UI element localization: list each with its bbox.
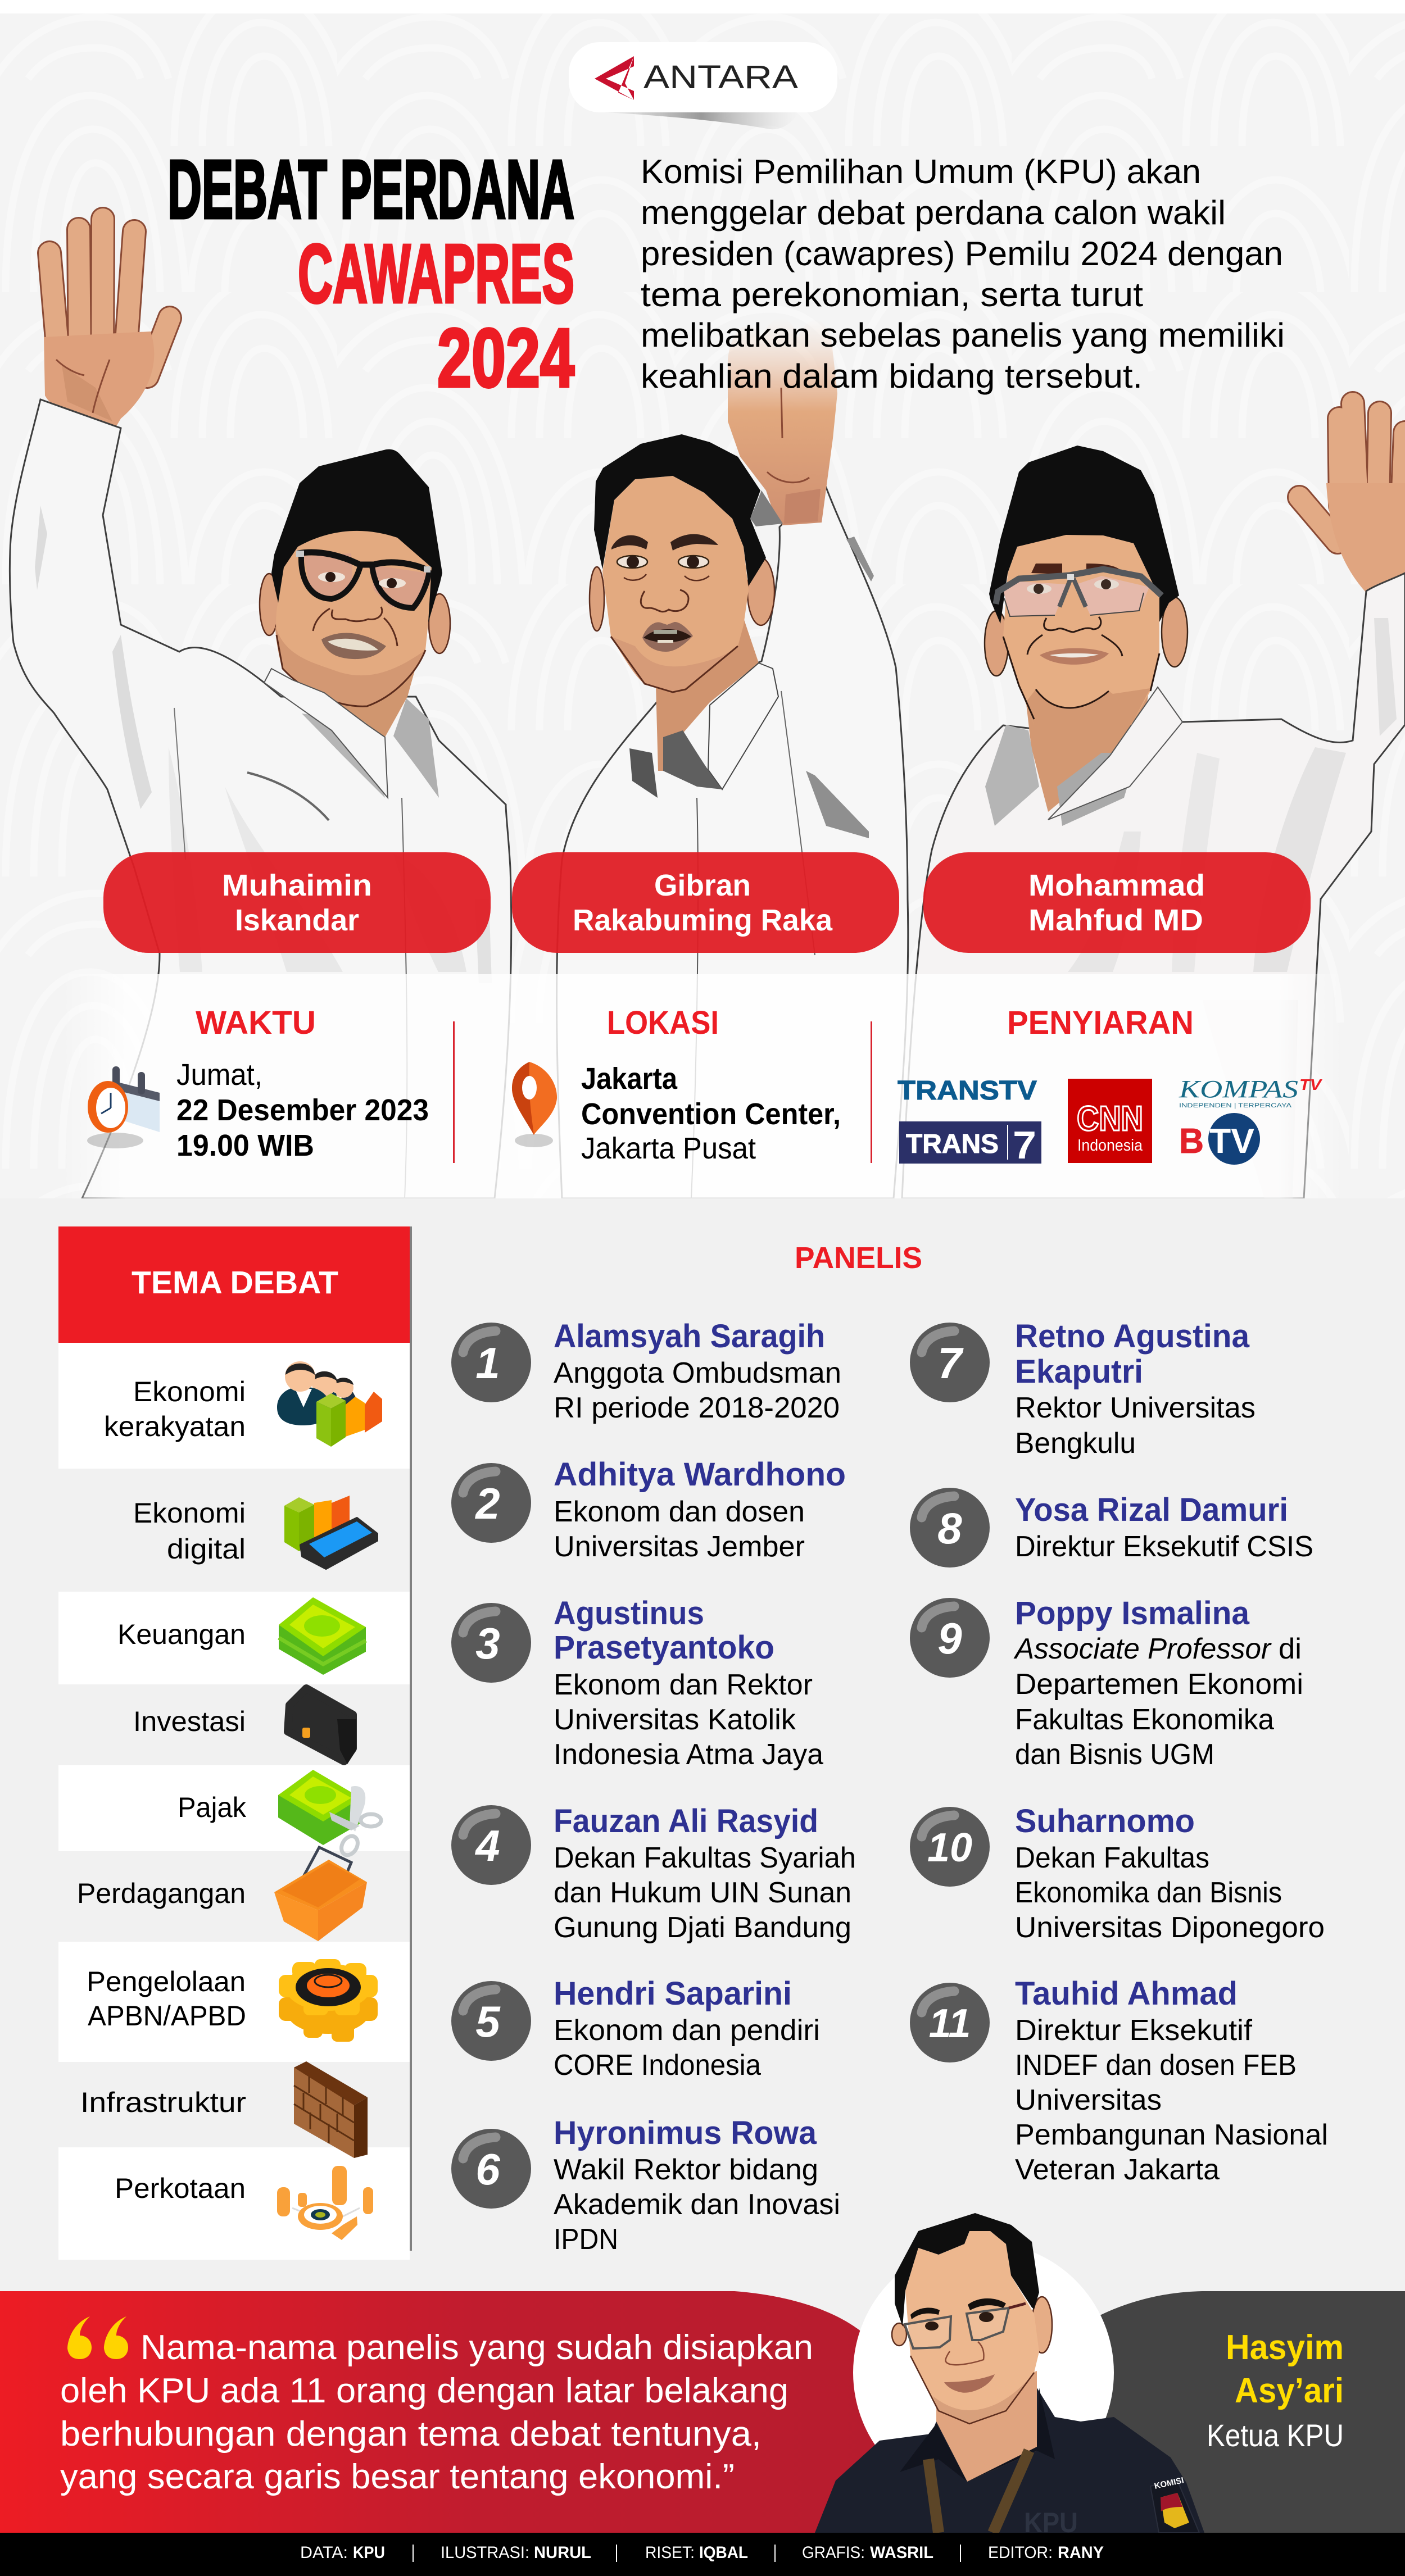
logo: CNN Indonesia: CNN xyxy=(1077,1100,1143,1138)
quote text: yang secara garis besar tentang ekonomi.” xyxy=(60,2457,735,2496)
row: perdagangan xyxy=(77,1847,367,1941)
cuff shadow xyxy=(750,490,783,526)
logo: Kompas TV: TV xyxy=(1299,1076,1323,1093)
panelist 4: Dekan Fakultas Syariah xyxy=(554,1842,856,1874)
panelist 10 xyxy=(910,1803,1325,1944)
panelist 10: Suharnomo xyxy=(1015,1803,1195,1839)
nose xyxy=(1027,617,1122,656)
panelist 3: Prasetyantoko xyxy=(554,1629,774,1666)
panelist 1: Anggota Ombudsman xyxy=(554,1357,841,1389)
panelist 9: Departemen Ekonomi xyxy=(1015,1668,1303,1701)
icon: quote mark xyxy=(67,2316,128,2359)
panelist 2: Adhitya Wardhono xyxy=(554,1456,846,1493)
footer credits: NURUL xyxy=(534,2543,591,2562)
panelist 11: Direktur Eksekutif xyxy=(1015,2014,1253,2047)
logo: BTV: TV xyxy=(1209,1122,1254,1161)
icon: red chevron xyxy=(595,56,634,100)
panelist 10: Universitas Diponegoro xyxy=(1015,1911,1325,1944)
row: pengelolaan APBN/APBD: Pengelolaan xyxy=(87,1966,246,1997)
row: ekonomi digital xyxy=(133,1496,377,1569)
nose xyxy=(641,590,688,612)
icon: money and scissors xyxy=(278,1770,381,1858)
icon: calendar clock xyxy=(87,1066,160,1148)
row: pajak: Pajak xyxy=(178,1792,247,1823)
footer credits: GRAFIS: xyxy=(802,2543,865,2562)
panelist 1: Alamsyah Saragih xyxy=(554,1318,825,1355)
panelist 1: 1 xyxy=(475,1338,500,1388)
name pill: Gibran Rakabuming Raka xyxy=(512,852,899,953)
panelist 6: Akademik dan Inovasi xyxy=(554,2188,840,2221)
text: waktu xyxy=(176,1058,429,1162)
text: lokasi: Convention Center, xyxy=(581,1097,841,1131)
panelist 6: 6 xyxy=(475,2145,500,2194)
icon: raised hand right xyxy=(1299,403,1405,593)
row: ekonomi kerakyatan xyxy=(104,1361,382,1447)
panelist 3: Agustinus xyxy=(554,1595,704,1632)
icon: briefcase xyxy=(288,1688,356,1764)
logo: Trans TV: TRANSTV xyxy=(898,1076,1037,1106)
panelist 11: 11 xyxy=(929,2001,971,2046)
heading: lokasi: LOKASI xyxy=(607,1005,719,1041)
face xyxy=(276,530,432,675)
logo: BTV: B xyxy=(1179,1122,1204,1161)
icon: gear xyxy=(279,1959,378,2042)
row: perdagangan: Perdagangan xyxy=(77,1878,246,1909)
neck and collar xyxy=(985,663,1182,826)
jacket xyxy=(815,2388,1204,2533)
title xyxy=(167,143,574,405)
icon: location pin xyxy=(512,1062,557,1147)
face xyxy=(602,476,749,692)
panelist 9 xyxy=(910,1595,1303,1771)
panelist 5: 5 xyxy=(475,1997,501,2046)
icon: people and blocks xyxy=(277,1361,382,1447)
panelist 7: Retno Agustina xyxy=(1015,1318,1250,1355)
badge: KOMISI xyxy=(1153,2475,1185,2491)
row: investasi: Investasi xyxy=(133,1706,246,1737)
panelist 7: Bengkulu xyxy=(1015,1427,1136,1460)
name pill: Mohammad Mahfud MD: Mahfud MD xyxy=(1028,903,1203,937)
nose xyxy=(945,2342,984,2365)
text: lokasi: Jakarta Pusat xyxy=(581,1132,756,1165)
panelist 6: Hyronimus Rowa xyxy=(554,2115,817,2151)
panelist 7: Rektor Universitas xyxy=(1015,1392,1256,1424)
panelist 9: Fakultas Ekonomika xyxy=(1015,1703,1274,1736)
title: CAWAPRES xyxy=(298,228,574,320)
cap xyxy=(989,446,1179,624)
illustration: three candidates xyxy=(10,219,1405,1198)
lanyard xyxy=(928,2451,1029,2533)
quote text: Nama-nama panelis yang sudah disiapkan xyxy=(140,2328,813,2367)
footer credits: IQBAL xyxy=(699,2543,748,2562)
panelist 9: 9 xyxy=(937,1614,962,1663)
panelist 8: Yosa Rizal Damuri xyxy=(1015,1492,1288,1528)
name pill: Mohammad Mahfud MD xyxy=(923,852,1311,953)
name pill: Gibran Rakabuming Raka: Rakabuming Raka xyxy=(573,903,833,937)
intro text xyxy=(641,153,1285,395)
panelist 4: Fauzan Ali Rasyid xyxy=(554,1803,818,1839)
mouth xyxy=(321,633,386,659)
row: perkotaan: Perkotaan xyxy=(115,2173,246,2204)
glasses xyxy=(296,551,430,608)
speaker name: Hasyim xyxy=(1226,2328,1344,2367)
panelist 5: Hendri Saparini xyxy=(554,1975,792,2012)
intro text: Komisi Pemilihan Umum (KPU) akan xyxy=(641,153,1201,190)
row: ekonomi kerakyatan: Ekonomi xyxy=(133,1376,246,1407)
panelist 11 xyxy=(910,1975,1328,2186)
grey speaker panel xyxy=(1012,2291,1405,2533)
heading: penyiaran: PENYIARAN xyxy=(1007,1005,1194,1041)
icon: raised hand left xyxy=(44,219,170,428)
footer credits: ILUSTRASI: xyxy=(441,2543,529,2562)
panelist 9: dan Bisnis UGM xyxy=(1015,1738,1214,1771)
name pill: Muhaimin Iskandar: Muhaimin xyxy=(222,869,372,902)
shirt folds xyxy=(1068,618,1397,1198)
row: ekonomi digital: digital xyxy=(167,1533,246,1565)
panelist 4: 4 xyxy=(474,1821,500,1870)
logo: Trans 7: TRANS xyxy=(906,1129,999,1159)
quote text: berhubungan dengan tema debat tentunya, xyxy=(60,2415,762,2454)
panelist 4: Gunung Djati Bandung xyxy=(554,1911,851,1944)
title: 2024 xyxy=(437,312,574,405)
hair xyxy=(594,434,766,586)
row: ekonomi kerakyatan: kerakyatan xyxy=(104,1411,246,1442)
shirt folds xyxy=(35,506,492,983)
shirt xyxy=(10,399,511,1198)
row: infrastruktur: Infrastruktur xyxy=(80,2087,246,2118)
panelist 7: Ekaputri xyxy=(1015,1353,1143,1390)
eyes xyxy=(318,572,406,588)
logo: Kompas TV xyxy=(1179,1075,1323,1109)
cap xyxy=(271,449,442,623)
text: lokasi xyxy=(581,1062,841,1165)
row: keuangan xyxy=(117,1597,366,1675)
ears xyxy=(590,558,774,631)
intro text: menggelar debat perdana calon wakil xyxy=(641,194,1226,231)
shirt xyxy=(902,573,1405,1198)
panelist 3: 3 xyxy=(475,1619,500,1668)
panelist 9: Poppy Ismalina xyxy=(1015,1595,1250,1632)
ears xyxy=(260,574,450,653)
figure: Gibran Rakabuming Raka xyxy=(557,318,908,1198)
portrait: Hasyim Asy'ari xyxy=(815,2213,1204,2538)
row: keuangan: Keuangan xyxy=(117,1619,246,1650)
eyes xyxy=(1027,579,1119,594)
heading: waktu: WAKTU xyxy=(196,1005,316,1041)
quote text xyxy=(60,2328,813,2496)
panelist 6 xyxy=(451,2115,840,2256)
name pill: Muhaimin Iskandar xyxy=(103,852,491,953)
eyes xyxy=(925,2312,994,2330)
panelist 11: Tauhid Ahmad xyxy=(1015,1975,1238,2012)
text: waktu: Jumat, xyxy=(176,1058,262,1092)
panelist 3: Universitas Katolik xyxy=(554,1703,796,1736)
icon: money stack xyxy=(279,1597,366,1675)
panelist 8: Direktur Eksekutif CSIS xyxy=(1015,1530,1313,1563)
table rows xyxy=(58,1343,410,2260)
nose xyxy=(313,607,397,646)
icon: blocks and phone xyxy=(284,1496,377,1569)
panelist 7: 7 xyxy=(937,1338,964,1388)
collar xyxy=(264,669,439,798)
icon: basket xyxy=(274,1847,367,1941)
panelist 8: 8 xyxy=(937,1503,962,1553)
glasses temple xyxy=(1009,2304,1026,2308)
face xyxy=(905,2231,1039,2424)
white circle behind portrait xyxy=(853,2242,1114,2503)
panelist 5: Ekonom dan pendiri xyxy=(554,2014,820,2047)
red quote band xyxy=(0,2291,955,2533)
heading: tema debat: TEMA DEBAT xyxy=(132,1265,338,1301)
panelist 11: Veteran Jakarta xyxy=(1015,2154,1220,2186)
glasses xyxy=(996,569,1162,616)
panelist 3 xyxy=(451,1595,823,1771)
icon: brick wall xyxy=(294,2061,368,2158)
logo: Kompas TV: INDEPENDEN | TERPERCAYA xyxy=(1179,1102,1292,1109)
panelist 10: Dekan Fakultas xyxy=(1015,1842,1209,1874)
logo: Trans 7 xyxy=(899,1121,1041,1167)
text: lokasi: Jakarta xyxy=(581,1062,678,1096)
eyebrows xyxy=(611,534,718,551)
row: infrastruktur xyxy=(80,2061,368,2158)
eyebrows xyxy=(910,2298,1006,2319)
panelist 5 xyxy=(451,1975,820,2082)
panelist 11: INDEF dan dosen FEB xyxy=(1015,2049,1297,2082)
badge xyxy=(1150,2475,1199,2533)
speaker name: Asy’ari xyxy=(1235,2371,1344,2410)
name pill: Muhaimin Iskandar: Iskandar xyxy=(235,903,359,937)
panelist 4: dan Hukum UIN Sunan xyxy=(554,1877,851,1909)
mouth xyxy=(1040,648,1109,665)
panelist 3: Indonesia Atma Jaya xyxy=(554,1738,823,1771)
panelist 1 xyxy=(451,1318,841,1424)
logo: BTV xyxy=(1179,1113,1260,1165)
mouth xyxy=(944,2374,995,2393)
panelist 2: Ekonom dan dosen xyxy=(554,1496,805,1528)
text: waktu: 22 Desember 2023 xyxy=(176,1093,429,1127)
name pill: Gibran Rakabuming Raka: Gibran xyxy=(654,869,751,902)
collar xyxy=(629,663,778,798)
logo: Kompas TV: KOMPAS xyxy=(1179,1075,1298,1103)
quote panel xyxy=(0,2213,1405,2538)
footer credits: RANY xyxy=(1058,2543,1104,2562)
speaker name xyxy=(1207,2328,1344,2453)
panel: panelis xyxy=(451,1241,1328,2256)
hero background with swirl pattern xyxy=(0,0,1405,1198)
logo: CNN Indonesia: Indonesia xyxy=(1077,1137,1143,1155)
neck xyxy=(656,618,759,771)
neck xyxy=(936,2371,1037,2482)
panelist 6: Wakil Rektor bidang xyxy=(554,2154,818,2186)
ears xyxy=(985,597,1188,676)
panelist 9: Associate Professor xyxy=(1013,1633,1272,1665)
row: pajak xyxy=(178,1770,381,1858)
icon: city hub xyxy=(277,2166,373,2240)
eyebrows xyxy=(1031,564,1122,574)
speaker name: Ketua KPU xyxy=(1207,2418,1344,2453)
intro text: presiden (cawapres) Pemilu 2024 dengan xyxy=(641,235,1283,272)
panelist 2: 2 xyxy=(474,1479,500,1528)
panelist 11: Universitas xyxy=(1015,2084,1162,2116)
intro text: tema perekonomian, serta turut xyxy=(641,276,1143,314)
hair xyxy=(895,2213,1039,2327)
footer credits: EDITOR: xyxy=(988,2543,1053,2562)
panelist 10: Ekonomika dan Bisnis xyxy=(1015,1877,1282,1909)
name pill: Mohammad Mahfud MD: Mohammad xyxy=(1028,869,1205,902)
panelist 3: Ekonom dan Rektor xyxy=(554,1669,813,1701)
panel: tema debat xyxy=(58,1226,412,2260)
logo: CNN Indonesia xyxy=(1068,1079,1152,1163)
footer credits: KPU xyxy=(353,2543,385,2562)
footer credits: WASRIL xyxy=(870,2543,933,2562)
title: DEBAT PERDANA xyxy=(167,143,574,236)
row: pengelolaan APBN/APBD xyxy=(87,1959,378,2042)
panelist 5: CORE Indonesia xyxy=(554,2049,761,2082)
panelist 8 xyxy=(910,1488,1313,1568)
row: investasi xyxy=(133,1688,356,1764)
ears xyxy=(892,2297,1052,2353)
intro text: keahlian dalam bidang tersebut. xyxy=(641,357,1143,395)
mouth xyxy=(642,622,693,652)
pocket label: KPU xyxy=(1024,2507,1078,2538)
face xyxy=(1003,531,1159,725)
heading: panelis: PANELIS xyxy=(795,1241,922,1275)
shirt xyxy=(557,481,908,1198)
figure: Mohammad Mahfud MD xyxy=(902,403,1405,1198)
info panel: waktu, lokasi, penyiaran xyxy=(62,974,1343,1198)
intro text: melibatkan sebelas panelis yang memiliki xyxy=(641,316,1285,354)
quote text: oleh KPU ada 11 orang dengan latar belakang xyxy=(60,2371,788,2410)
panelist 9: di xyxy=(1279,1633,1302,1665)
logo: ANTARA xyxy=(569,42,837,129)
collar xyxy=(900,2388,1055,2482)
figure: Muhaimin Iskandar xyxy=(10,219,511,1198)
panelist 1: RI periode 2018-2020 xyxy=(554,1392,840,1424)
panelist 7 xyxy=(910,1318,1256,1460)
neck xyxy=(341,671,415,737)
footer credits xyxy=(0,2533,1405,2576)
panelist 2: Universitas Jember xyxy=(554,1530,805,1563)
panelist 6: IPDN xyxy=(554,2223,618,2256)
shirt folds xyxy=(806,537,874,838)
row: ekonomi digital: Ekonomi xyxy=(133,1497,246,1529)
heading: tema debat xyxy=(58,1226,410,1343)
panelist 4 xyxy=(451,1803,856,1944)
footer credits: RISET: xyxy=(645,2543,695,2562)
text: waktu: 19.00 WIB xyxy=(176,1129,314,1162)
logo: Trans 7: 7 xyxy=(1013,1123,1036,1167)
panelist 11: Pembangunan Nasional xyxy=(1015,2119,1328,2151)
row: pengelolaan APBN/APBD: APBN/APBD xyxy=(88,2000,246,2032)
glasses xyxy=(905,2308,1009,2348)
logo: ANTARA: ANTARA xyxy=(643,59,798,96)
icon: raised hand middle xyxy=(728,318,837,525)
footer credits: DATA: xyxy=(300,2543,348,2562)
eyes xyxy=(617,556,709,580)
panelist 2 xyxy=(451,1456,846,1563)
panelist 10: 10 xyxy=(927,1825,972,1870)
row: perkotaan xyxy=(115,2166,373,2240)
